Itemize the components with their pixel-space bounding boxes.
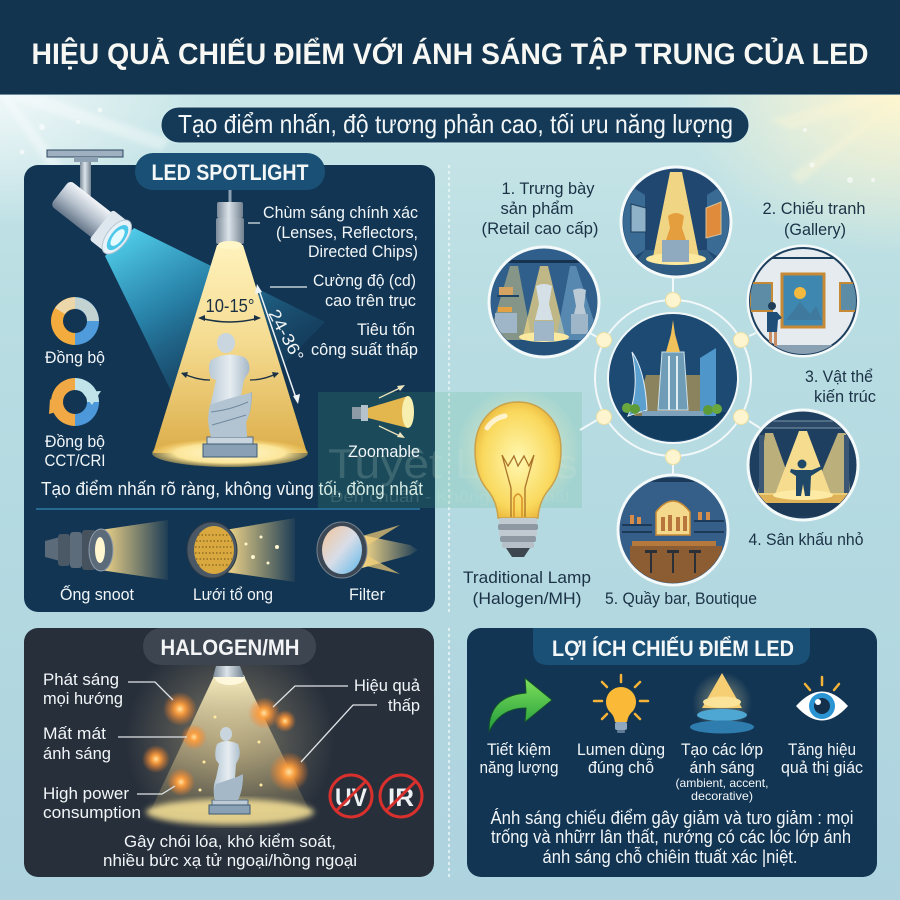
subtitle pill: Tạo điểm nhấn, độ tương phản cao, tối ưu năng lượng: [178, 109, 733, 139]
labels: applications: 4. Sân khấu nhỏ: [748, 530, 864, 549]
field angle 24-36: 24-36°: [264, 306, 307, 365]
statue: [209, 727, 250, 814]
label: saving: năng lượng: [480, 758, 558, 777]
hub: applications diagram: [580, 277, 760, 476]
icon: no IR: IR: [388, 784, 414, 812]
callout: low efficiency: thấp: [388, 696, 420, 715]
icon: CCT/CRI sync arrows: [49, 378, 101, 426]
label: lumen: đúng chỗ: [588, 758, 654, 777]
icon: no IR: [380, 775, 422, 817]
icon: green arrow: [489, 678, 552, 732]
label: layers: (ambient, accent,: [676, 776, 768, 790]
accessory: snoot: [45, 520, 168, 604]
watermark: Tuyệt Lights: [328, 440, 578, 487]
callout: intensity: [313, 271, 416, 310]
icon: halogen fixture: [213, 666, 244, 677]
halogen summary: nhiều bức xạ tử ngoại/hồng ngoại: [103, 851, 357, 870]
scene: gallery: [748, 246, 860, 360]
label: CCT/CRI sync: CCT/CRI: [44, 451, 106, 470]
label: layers: Tạo các lớp: [681, 740, 763, 759]
heading: benefits: [533, 628, 810, 665]
scene: stage: [748, 410, 860, 520]
panel: halogen: [24, 628, 434, 877]
accessory: filter: Filter: [349, 585, 385, 604]
blue light beam: [105, 228, 325, 450]
icon: track spotlight: [47, 150, 137, 259]
callout: intensity: Cường độ (cd): [313, 271, 416, 290]
accessory: filter: [317, 522, 418, 604]
callouts: halogen left: consumption: [43, 803, 141, 822]
scene: architecture centre: [608, 313, 738, 444]
title banner: [0, 0, 900, 94]
icon: light layers: [690, 672, 754, 734]
label: layers: [676, 740, 768, 803]
background: [0, 94, 900, 260]
callout lines: [248, 223, 307, 287]
callout: low efficiency: Hiệu quả: [354, 676, 421, 695]
accessory: snoot: Ống snoot: [60, 584, 134, 604]
beam angle 10-15: 10-15°: [206, 296, 254, 316]
callout: intensity: cao trên trục: [325, 291, 416, 310]
title banner: HIỆU QUẢ CHIẾU ĐIỂM VỚI ÁNH SÁNG TẬP TRUNG CỦA LED: [32, 37, 868, 71]
statue: [181, 333, 279, 457]
callout: precise beam: [263, 203, 418, 261]
icon: traditional bulb: [456, 388, 580, 557]
callout: precise beam: Chùm sáng chính xác: [263, 203, 418, 222]
label: visual: [781, 740, 863, 777]
panel: LED spotlight: [24, 150, 435, 612]
label: lumen: [577, 740, 665, 777]
accessory: honeycomb grid: [187, 518, 295, 604]
label: traditional lamp: [463, 568, 591, 608]
scene: bar and boutique: [618, 475, 728, 586]
labels: applications: (Gallery): [784, 220, 846, 239]
label: saving: Tiết kiệm: [487, 740, 551, 759]
callout: low power: công suất thấp: [311, 340, 418, 359]
benefits paragraph: ánh sáng chỗ chiêin ttuất xác |niệt.: [542, 846, 798, 867]
label: traditional lamp: Traditional Lamp: [463, 568, 591, 587]
scene: museum display: [621, 167, 731, 280]
watermark: [318, 392, 582, 508]
panel: LED benefits: [467, 628, 877, 877]
icon: zoomable lens: [348, 385, 420, 461]
callouts: halogen left: mọi hướng: [43, 689, 123, 708]
labels: applications: 3. Vật thể: [805, 367, 873, 386]
heading: halogen: [143, 628, 316, 665]
label: layers: ánh sáng: [690, 758, 754, 777]
label: sync: Đồng bộ: [45, 348, 105, 367]
callouts: halogen left: Phát sáng: [43, 670, 119, 689]
benefits paragraph: [490, 808, 854, 867]
lost light orange dots: [142, 692, 309, 796]
labels: applications: sản phẩm: [500, 199, 574, 218]
labels: applications: 1. Trưng bày: [502, 179, 595, 198]
labels: applications: kiến trúc: [814, 387, 876, 406]
icon: no UV: [330, 775, 372, 817]
icon: zoomable lens: Zoomable: [348, 442, 420, 461]
label: saving: [480, 740, 558, 777]
summary line: Tạo điểm nhấn rõ ràng, không vùng tối, đồng nhất: [41, 479, 423, 499]
beam angle 10-15: [198, 296, 261, 322]
label: visual: quả thị giác: [781, 758, 863, 777]
icon: lightbulb: [594, 675, 648, 733]
accessory: honeycomb grid: Lưới tổ ong: [193, 585, 273, 604]
yellow light cone: [152, 245, 308, 467]
halogen summary: Gây chói lóa, khó kiểm soát,: [124, 832, 336, 851]
heading: halogen: HALOGEN/MH: [160, 635, 300, 660]
scene: retail: [488, 247, 600, 360]
divider: dashed column separator: [448, 165, 450, 877]
icon: no UV: UV: [335, 784, 367, 812]
callout: precise beam: (Lenses, Reflectors,: [276, 223, 418, 242]
heading: LED spotlight: LED SPOTLIGHT: [152, 160, 309, 185]
callout: low power: Tiêu tốn: [357, 320, 415, 339]
callouts: halogen left: High power: [43, 784, 129, 803]
benefits paragraph: Ánh sáng chiếu điểm gây giảm và tưo giảm : mọi: [490, 808, 854, 828]
light cone: [146, 671, 314, 825]
label: CCT/CRI sync: Đồng bộ: [45, 432, 105, 451]
label: traditional lamp: (Halogen/MH): [472, 589, 582, 608]
halogen summary: [103, 832, 357, 870]
callout: precise beam: Directed Chips): [308, 242, 418, 261]
field angle 24-36: [255, 284, 307, 404]
benefits paragraph: trống và nhữrr lân thất, nướng có các lóc lớp ánh: [491, 827, 851, 847]
callouts: halogen left: [43, 670, 141, 822]
labels: applications: [482, 179, 876, 608]
callout: low efficiency: [354, 676, 421, 715]
watermark: Đèn chuẩn - Không gian chất: [330, 488, 571, 506]
callouts: halogen left: ánh sáng: [43, 744, 111, 763]
heading: LED spotlight: [135, 153, 325, 190]
labels: applications: 2. Chiếu tranh: [762, 199, 866, 218]
callout lines: [118, 682, 377, 794]
heading: benefits: LỢI ÍCH CHIẾU ĐIỂM LED: [552, 636, 794, 661]
labels: applications: (Retail cao cấp): [482, 219, 598, 238]
label: visual: Tăng hiệu: [788, 740, 856, 759]
icon: eye: [796, 677, 848, 720]
callouts: halogen left: Mất mát: [43, 724, 106, 743]
label: layers: decorative): [691, 789, 753, 803]
icon: spotlight fixture: [216, 190, 244, 249]
label: lumen: Lumen dùng: [577, 740, 665, 759]
label: CCT/CRI sync: [44, 432, 106, 470]
labels: applications: 5. Quầy bar, Boutique: [605, 589, 757, 608]
icon: colour sync ring: [51, 297, 99, 345]
callout: low power: [311, 320, 418, 359]
